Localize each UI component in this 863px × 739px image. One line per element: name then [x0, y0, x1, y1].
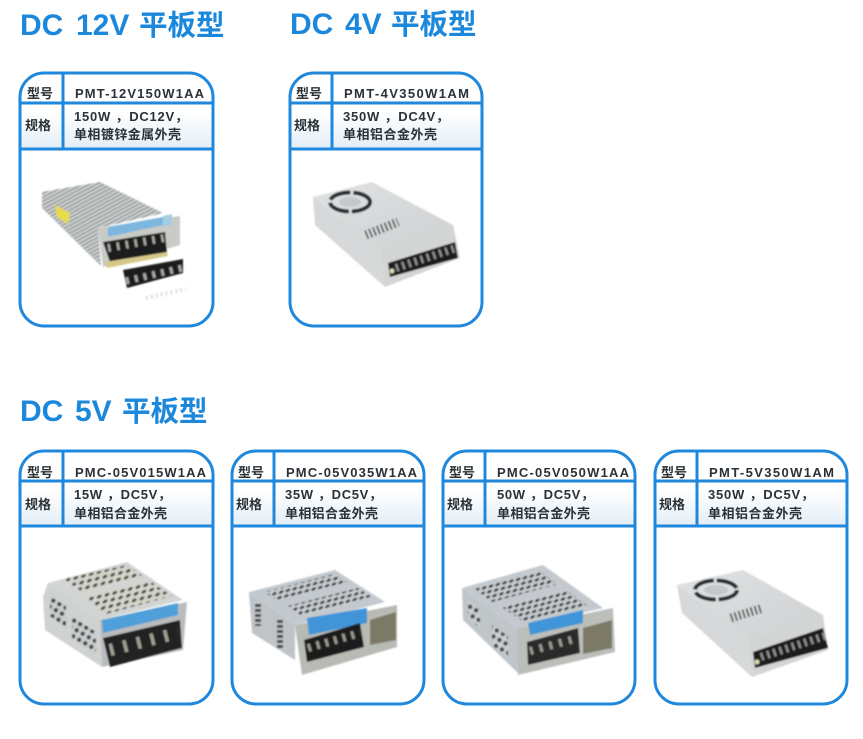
card: PMT-12V150W1AA [20, 73, 213, 326]
spec text line 2: 单相铝合金外壳 [74, 506, 167, 521]
heading: DC 5V: 平板型 [122, 396, 208, 428]
label: model key: 型号 [296, 86, 322, 101]
heading: DC 4V: 4V [345, 8, 382, 41]
card: PMT-5V350W1AM [655, 451, 847, 704]
card: PMC-05V015W1AA [20, 451, 213, 704]
model number: PMT-12V150W1AA [75, 86, 205, 101]
heading: DC 4V: 平板型 [391, 9, 477, 41]
card: PMT-4V350W1AM [290, 73, 482, 326]
label: model key: 型号 [27, 86, 53, 101]
label: spec key: 规格 [25, 497, 51, 512]
spec text: 150W ，DC12V， [74, 109, 188, 124]
heading: DC 5V: 5V [75, 395, 112, 428]
spec text line 2: 单相铝合金外壳 [343, 127, 437, 142]
label: spec key: 规格 [447, 497, 473, 512]
label: spec key: 规格 [294, 118, 320, 133]
product: 50W perforated supply [462, 565, 615, 675]
product: 15W perforated supply [43, 562, 187, 667]
product: enclosed supply with fan [313, 182, 460, 287]
label: model key: 型号 [238, 465, 264, 480]
heading: DC 4V: DC [290, 8, 333, 41]
model number: PMT-5V350W1AM [709, 465, 834, 480]
label: spec key: 规格 [236, 497, 262, 512]
spec text line 2: 单相铝合金外壳 [708, 506, 802, 521]
spec text: 350W ，DC5V， [708, 487, 814, 502]
heading: DC 12V: DC [20, 9, 63, 42]
spec text line 2: 单相镀锌金属外壳 [74, 127, 181, 142]
label: spec key: 规格 [659, 497, 685, 512]
heading: DC 5V: DC [20, 395, 63, 428]
card: PMC-05V035W1AA [232, 451, 424, 704]
spec text: 50W ，DC5V， [497, 487, 594, 502]
product: 35W perforated supply [249, 570, 397, 675]
product: open frame supply with terminal block [42, 182, 186, 298]
model number: PMT-4V350W1AM [344, 86, 469, 101]
model number: PMC-05V050W1AA [497, 465, 630, 480]
label: model key: 型号 [449, 465, 475, 480]
label: model key: 型号 [661, 465, 687, 480]
product: enclosed supply with fan [677, 570, 828, 677]
model number: PMC-05V035W1AA [286, 465, 418, 480]
label: spec key: 规格 [25, 118, 51, 133]
spec text line 2: 单相铝合金外壳 [285, 506, 378, 521]
label: model key: 型号 [27, 465, 53, 480]
card: PMC-05V050W1AA [443, 451, 635, 704]
spec text: 35W ，DC5V， [285, 487, 382, 502]
spec text line 2: 单相铝合金外壳 [497, 506, 590, 521]
spec text: 15W ，DC5V， [74, 487, 171, 502]
heading: DC 12V: 平板型 [139, 10, 225, 42]
model number: PMC-05V015W1AA [75, 465, 207, 480]
heading: DC 12V: 12V [76, 9, 129, 42]
spec text: 350W ，DC4V， [343, 109, 449, 124]
